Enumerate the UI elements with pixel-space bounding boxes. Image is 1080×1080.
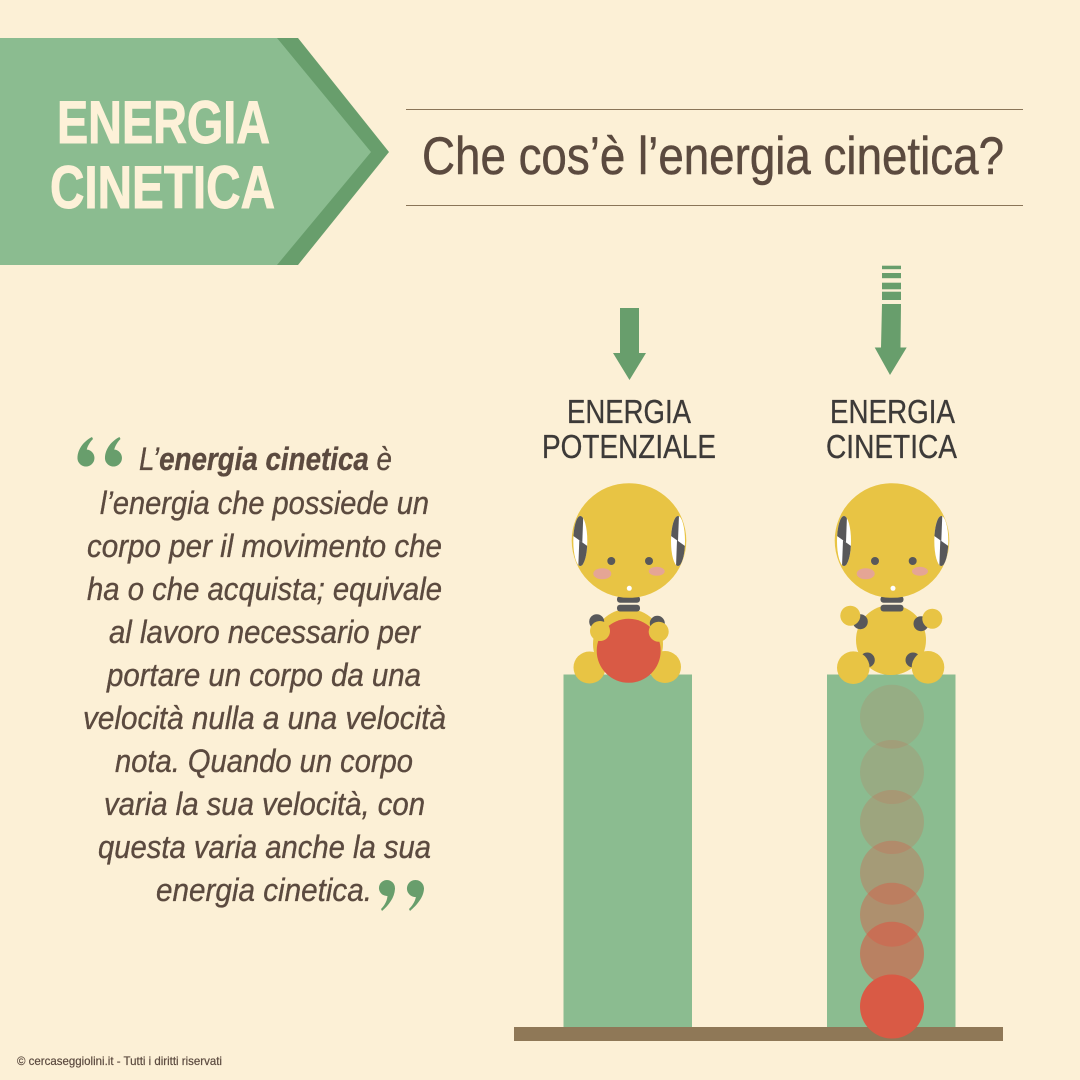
cheeks (593, 567, 665, 579)
figure: dummy arms raised (835, 483, 949, 684)
title text: ENERGIA (57, 89, 270, 156)
column: energia cinetica (826, 266, 957, 1038)
arrow: kinetic with speed lines (875, 266, 907, 375)
label: energia potenziale (542, 393, 716, 465)
icon: opening quotes (77, 437, 122, 466)
quote text: ha o che acquista; equivale (87, 571, 442, 607)
pillar (827, 674, 956, 1027)
quote text: energia cinetica. (156, 872, 372, 908)
right marker (671, 516, 685, 566)
label: energia cinetica: ENERGIA (830, 393, 955, 430)
dummy feet (574, 652, 606, 684)
quote text: velocità nulla a una velocità (83, 700, 446, 736)
neck (617, 596, 640, 612)
title text: CINETICA (50, 154, 275, 221)
pillar (564, 674, 692, 1027)
quote text: nota. Quando un corpo (115, 743, 413, 779)
eyes (871, 557, 917, 565)
eyes (607, 557, 653, 565)
quote text: corpo per il movimento che (87, 528, 442, 564)
dummy body (856, 605, 926, 675)
title text (50, 89, 275, 221)
hands (840, 606, 942, 629)
column: energia potenziale (542, 308, 716, 1027)
copyright footer: © cercaseggiolini.it - Tutti i diritti riservati (17, 1054, 222, 1068)
quote text: portare un corpo da una (106, 657, 421, 693)
dummy joints (853, 614, 928, 668)
feet (837, 651, 944, 684)
nose (627, 586, 632, 591)
head (835, 483, 949, 598)
icon: closing quotes (379, 880, 424, 911)
falling ball trail (860, 685, 924, 1038)
quote text: l’energia che possiede un (100, 485, 429, 521)
dummy shoulders (589, 614, 604, 629)
figure: dummy holding ball (572, 483, 686, 684)
label: energia potenziale: POTENZIALE (542, 428, 716, 465)
cheeks (857, 567, 928, 579)
ball (860, 974, 924, 1038)
nose (890, 586, 896, 591)
hands (590, 621, 669, 642)
neck (880, 596, 904, 612)
left marker (573, 516, 588, 566)
arrow: potential (613, 308, 646, 380)
quote text (83, 441, 446, 908)
quote text: questa varia anche la sua (98, 829, 431, 865)
question heading: Che cos’è l’energia cinetica? (422, 127, 1004, 186)
right marker (934, 516, 948, 566)
title banner (0, 38, 389, 265)
quote block (77, 437, 446, 911)
quote text: L’energia cinetica è (139, 441, 392, 477)
dummy body (593, 609, 663, 679)
label: energia potenziale: ENERGIA (567, 393, 691, 430)
quote text: al lavoro necessario per (109, 614, 421, 650)
ground bar (514, 1027, 1003, 1041)
left marker (837, 516, 851, 566)
label: energia cinetica (826, 393, 957, 465)
ball (597, 619, 661, 683)
label: energia cinetica: CINETICA (826, 428, 957, 465)
head (572, 483, 686, 598)
quote text: varia la sua velocità, con (104, 786, 425, 822)
